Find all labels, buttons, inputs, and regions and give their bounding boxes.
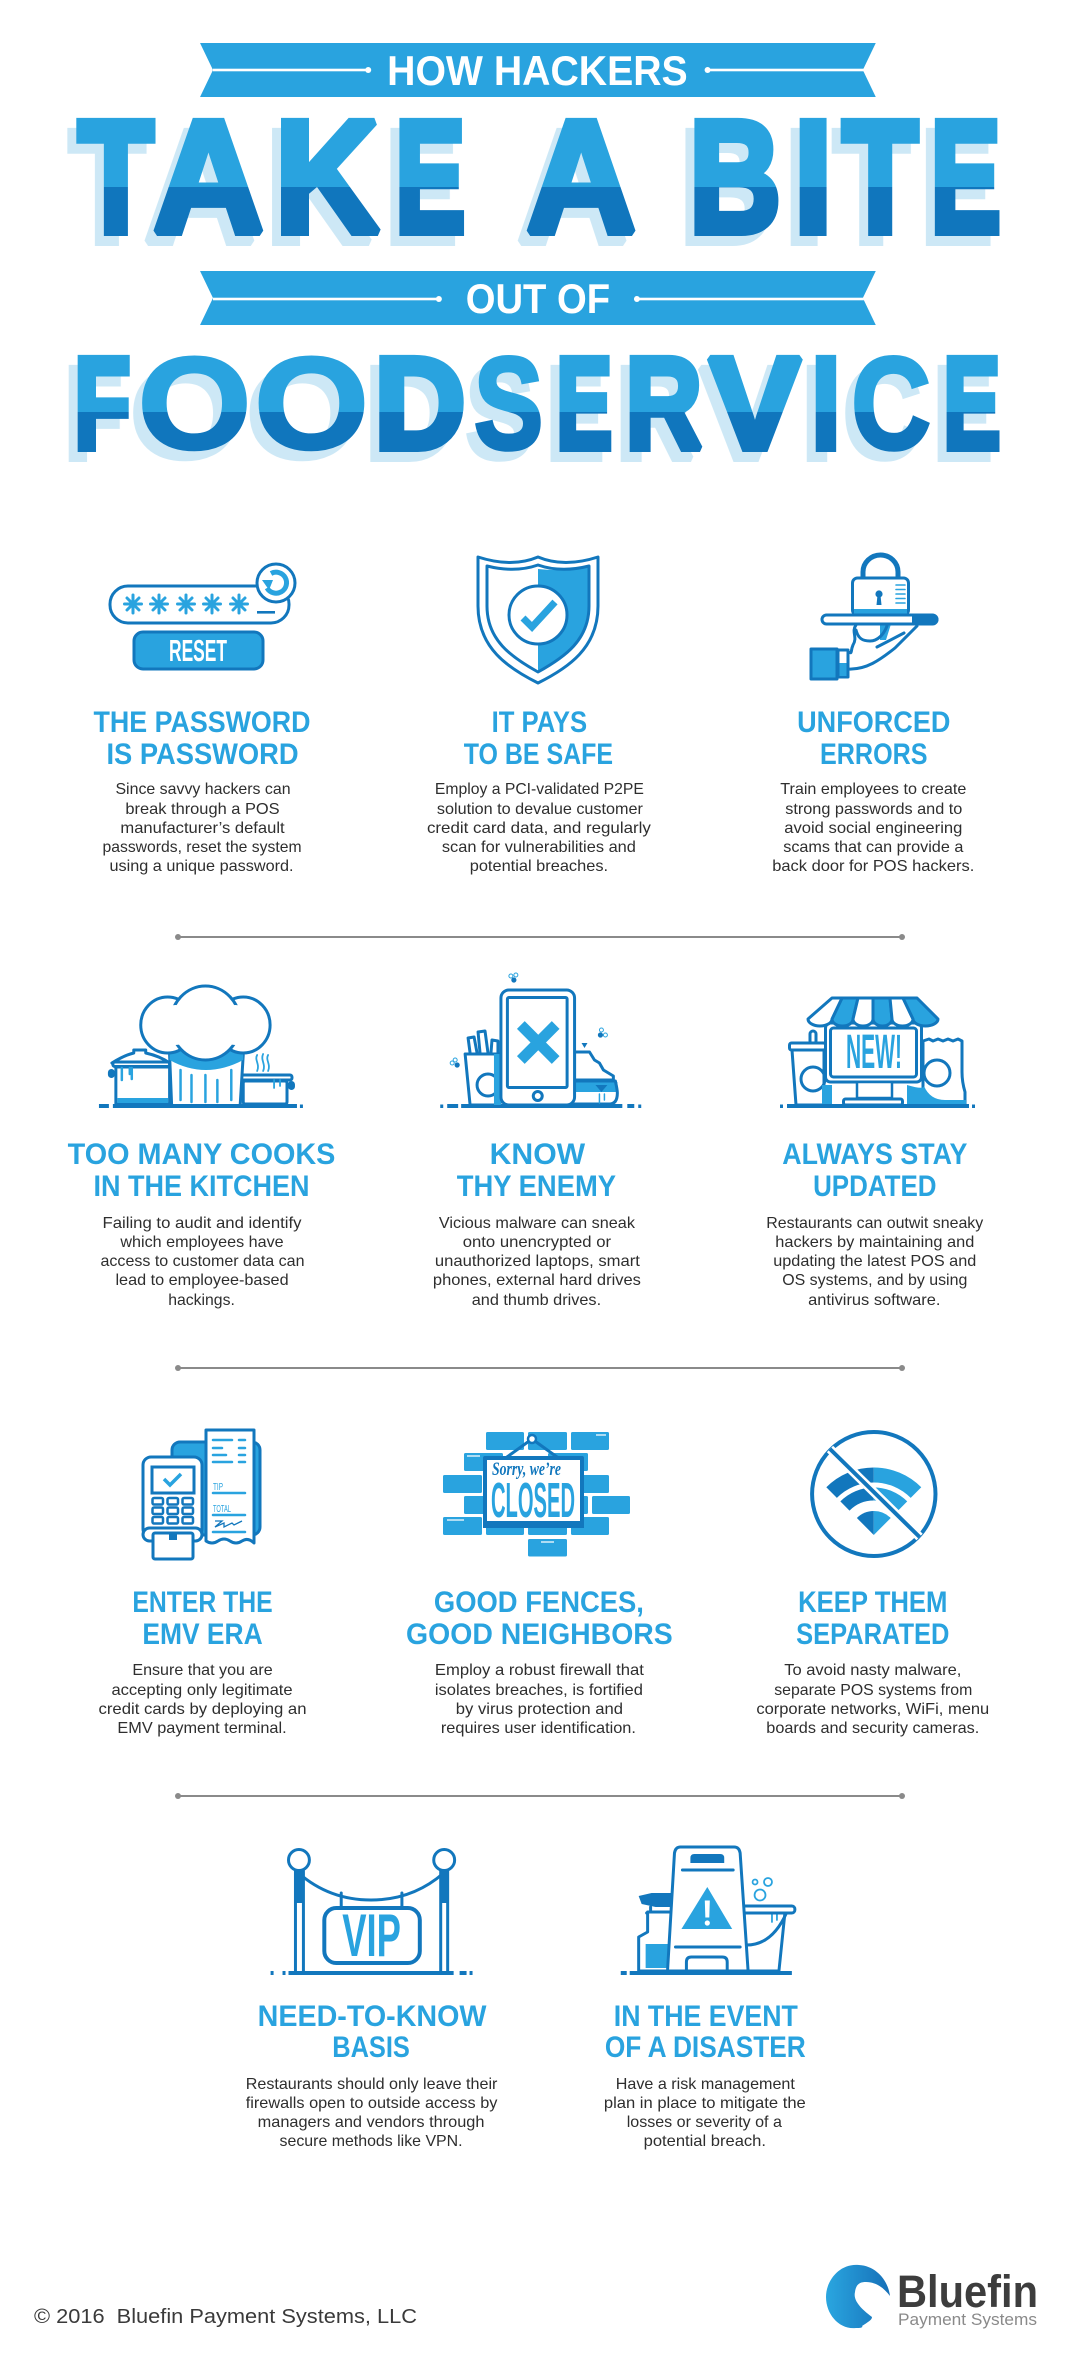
heading: TOO MANY COOKS	[68, 1138, 335, 1171]
headline: foodservice: E	[943, 330, 1001, 477]
text block: corporate networks, WiFi, menu	[756, 1701, 989, 1718]
panel: know thy enemy	[433, 973, 641, 1309]
panel: enter the emv era	[99, 1430, 307, 1737]
heading: OF A DISASTER	[605, 2031, 806, 2064]
heading: IT PAYS	[492, 706, 587, 739]
panel: the password is password	[94, 564, 311, 875]
headline: foodservice: I	[812, 330, 840, 477]
text block: Since savvy hackers can	[115, 781, 291, 798]
text block: potential breach.	[644, 2133, 766, 2150]
text block: Train employees to create	[780, 781, 966, 798]
text block: managers and vendors through	[258, 2114, 484, 2131]
headline: foodservice	[74, 330, 1001, 477]
logo: bluefin payment systems: Payment Systems	[898, 2310, 1037, 2329]
panel: need-to-know basis	[246, 1850, 498, 2150]
text block	[101, 1215, 305, 1309]
panel: keep them separated	[756, 1432, 989, 1737]
logo: bluefin payment systems	[826, 2265, 1038, 2329]
text block: using a unique password.	[109, 858, 294, 875]
text block: phones, external hard drives	[433, 1272, 641, 1289]
headline: foodservice: F	[74, 330, 131, 477]
heading: IN THE EVENT	[614, 2000, 798, 2033]
headline: take a bite: E	[395, 88, 466, 266]
text block	[604, 2076, 806, 2150]
icon: password reset	[110, 564, 295, 669]
heading	[464, 706, 613, 771]
text block	[99, 1662, 307, 1737]
icon: phone with x and flies	[440, 973, 641, 1108]
heading	[605, 2000, 806, 2064]
heading: IN THE KITCHEN	[94, 1170, 310, 1203]
text block: access to customer data can	[101, 1253, 305, 1270]
text block: and thumb drives.	[472, 1292, 601, 1309]
heading	[782, 1138, 967, 1203]
headline: take a bite: T	[842, 88, 918, 266]
text block: Restaurants should only leave their	[246, 2076, 497, 2093]
headline: foodservice: C	[851, 330, 931, 477]
panel: unforced errors	[772, 555, 974, 875]
text block: secure methods like VPN.	[280, 2133, 463, 2150]
heading: KEEP THEM	[798, 1586, 947, 1619]
headline: foodservice: E	[556, 330, 612, 477]
text block: credit card data, and regularly	[427, 820, 651, 837]
icon: storefront monitor	[780, 998, 975, 1108]
icon: brick wall with closed sign	[443, 1432, 630, 1556]
headline: take a bite: T	[78, 88, 154, 266]
icon: storefront monitor: NEW!	[846, 1026, 902, 1079]
text block: onto unencrypted or	[463, 1234, 611, 1251]
text block: potential breaches.	[470, 858, 608, 875]
text block: back door for POS hackers.	[772, 858, 974, 875]
headline: take a bite: K	[275, 88, 379, 266]
icon: password reset: RESET	[169, 633, 227, 668]
icon: brick wall with closed sign: CLOSED	[491, 1474, 575, 1528]
heading: SEPARATED	[796, 1618, 949, 1651]
heading	[258, 2000, 487, 2064]
heading: NEED-TO-KNOW	[258, 2000, 487, 2033]
icon: chef hat and pots	[99, 986, 303, 1108]
heading: GOOD FENCES,	[434, 1586, 644, 1619]
text block	[766, 1215, 984, 1309]
icon: brick wall with closed sign: Sorry, we’re	[492, 1459, 561, 1480]
text block: To avoid nasty malware,	[784, 1662, 961, 1679]
banner: out of	[200, 271, 876, 325]
text block: Employ a PCI-validated P2PE	[435, 781, 644, 798]
text block: credit cards by deploying an	[99, 1701, 307, 1718]
text block: by virus protection and	[456, 1701, 623, 1718]
icon: wet floor sign and cleaning supplies	[621, 1847, 795, 1975]
text block	[427, 781, 651, 875]
text block: requires user identification.	[441, 1720, 636, 1737]
text block: scan for vulnerabilities and	[442, 839, 636, 856]
panel: good fences good neighbors	[406, 1432, 673, 1737]
text block: manufacturer’s default	[120, 820, 285, 837]
icon: vip rope	[271, 1850, 473, 1975]
banner: how hackers	[200, 43, 876, 97]
icon: payment terminal and receipt: TOTAL	[213, 1504, 231, 1515]
heading: IS PASSWORD	[106, 738, 299, 771]
text block: Ensure that you are	[132, 1662, 273, 1679]
panel: too many cooks in the kitchen	[68, 986, 335, 1309]
heading	[457, 1138, 616, 1203]
text block: solution to devalue customer	[437, 801, 643, 818]
heading: ALWAYS STAY	[782, 1138, 967, 1171]
heading	[132, 1586, 273, 1651]
headline: foodservice: R	[625, 330, 702, 477]
text block: avoid social engineering	[784, 820, 962, 837]
headline: foodservice: O	[254, 330, 369, 477]
headline: foodservice: O	[138, 330, 251, 477]
headline: foodservice: D	[374, 330, 466, 477]
logo: bluefin payment systems: Bluefin	[897, 2266, 1038, 2317]
headline: take a bite: A	[153, 88, 264, 266]
panel: in the event of a disaster	[604, 1847, 806, 2150]
title	[74, 43, 1001, 477]
heading: EMV ERA	[142, 1618, 263, 1651]
text block: which employees have	[119, 1234, 284, 1251]
heading: TO BE SAFE	[464, 738, 613, 771]
text block: EMV payment terminal.	[117, 1720, 287, 1737]
heading: THE PASSWORD	[94, 706, 311, 739]
text block: strong passwords and to	[785, 801, 962, 818]
text block	[772, 781, 974, 875]
text block	[246, 2076, 498, 2150]
text block: Vicious malware can sneak	[439, 1215, 635, 1232]
headline: take a bite: I	[794, 88, 832, 266]
text block	[103, 781, 302, 875]
heading	[797, 706, 950, 771]
text block: passwords, reset the system	[103, 839, 302, 856]
heading: THY ENEMY	[457, 1170, 616, 1203]
text block	[756, 1662, 989, 1737]
panel: always stay updated	[766, 998, 984, 1309]
text block: updating the latest POS and	[773, 1253, 976, 1270]
text block: hackings.	[168, 1292, 235, 1309]
panel: it pays to be safe	[427, 557, 651, 875]
heading: UNFORCED	[797, 706, 950, 739]
banner: out of: OUT OF	[466, 275, 610, 322]
text block: plan in place to mitigate the	[604, 2095, 806, 2112]
headline: take a bite: E	[930, 88, 1001, 266]
headline: foodservice: S	[474, 330, 543, 477]
heading	[796, 1586, 949, 1651]
text block: Restaurants can outwit sneaky	[766, 1215, 984, 1232]
text block	[433, 1215, 641, 1309]
icon: lock on a tray	[811, 555, 938, 679]
icon: payment terminal and receipt	[143, 1430, 260, 1559]
banner: how hackers: HOW HACKERS	[387, 47, 688, 94]
text block: unauthorized laptops, smart	[435, 1253, 641, 1270]
headline: take a bite	[78, 88, 1001, 266]
heading	[68, 1138, 335, 1203]
heading: GOOD NEIGHBORS	[406, 1618, 673, 1651]
text block: hackers by maintaining and	[775, 1234, 974, 1251]
headline: take a bite: A	[526, 88, 636, 266]
headline: foodservice: V	[709, 330, 800, 477]
heading	[406, 1586, 673, 1651]
heading: ERRORS	[820, 738, 928, 771]
icon: vip rope: VIP	[342, 1902, 401, 1969]
text block: firewalls open to outside access by	[246, 2095, 498, 2112]
text block: separate POS systems from	[774, 1682, 972, 1699]
icon: payment terminal and receipt: TIP	[213, 1482, 223, 1493]
headline: take a bite: B	[689, 88, 781, 266]
heading	[94, 706, 311, 771]
heading: ENTER THE	[132, 1586, 273, 1619]
text block: losses or severity of a	[627, 2114, 782, 2131]
heading: KNOW	[490, 1138, 586, 1171]
text block: Failing to audit and identify	[103, 1215, 302, 1232]
text block: antivirus software.	[808, 1292, 940, 1309]
text block: lead to employee-based	[115, 1272, 289, 1289]
icon: no wifi	[812, 1432, 935, 1556]
text block: Employ a robust firewall that	[435, 1662, 645, 1679]
copyright: © 2016 Bluefin Payment Systems, LLC	[34, 2306, 417, 2328]
text block: isolates breaches, is fortified	[435, 1682, 643, 1699]
text block: Have a risk management	[616, 2076, 796, 2093]
heading: BASIS	[332, 2031, 410, 2064]
text block	[435, 1662, 645, 1737]
text block: OS systems, and by using	[782, 1272, 967, 1289]
text block: break through a POS	[125, 801, 280, 818]
text block: scams that can provide a	[783, 839, 964, 856]
icon: shield	[478, 557, 598, 683]
text block: accepting only legitimate	[111, 1682, 293, 1699]
heading: UPDATED	[813, 1170, 936, 1203]
text block: boards and security cameras.	[766, 1720, 979, 1737]
